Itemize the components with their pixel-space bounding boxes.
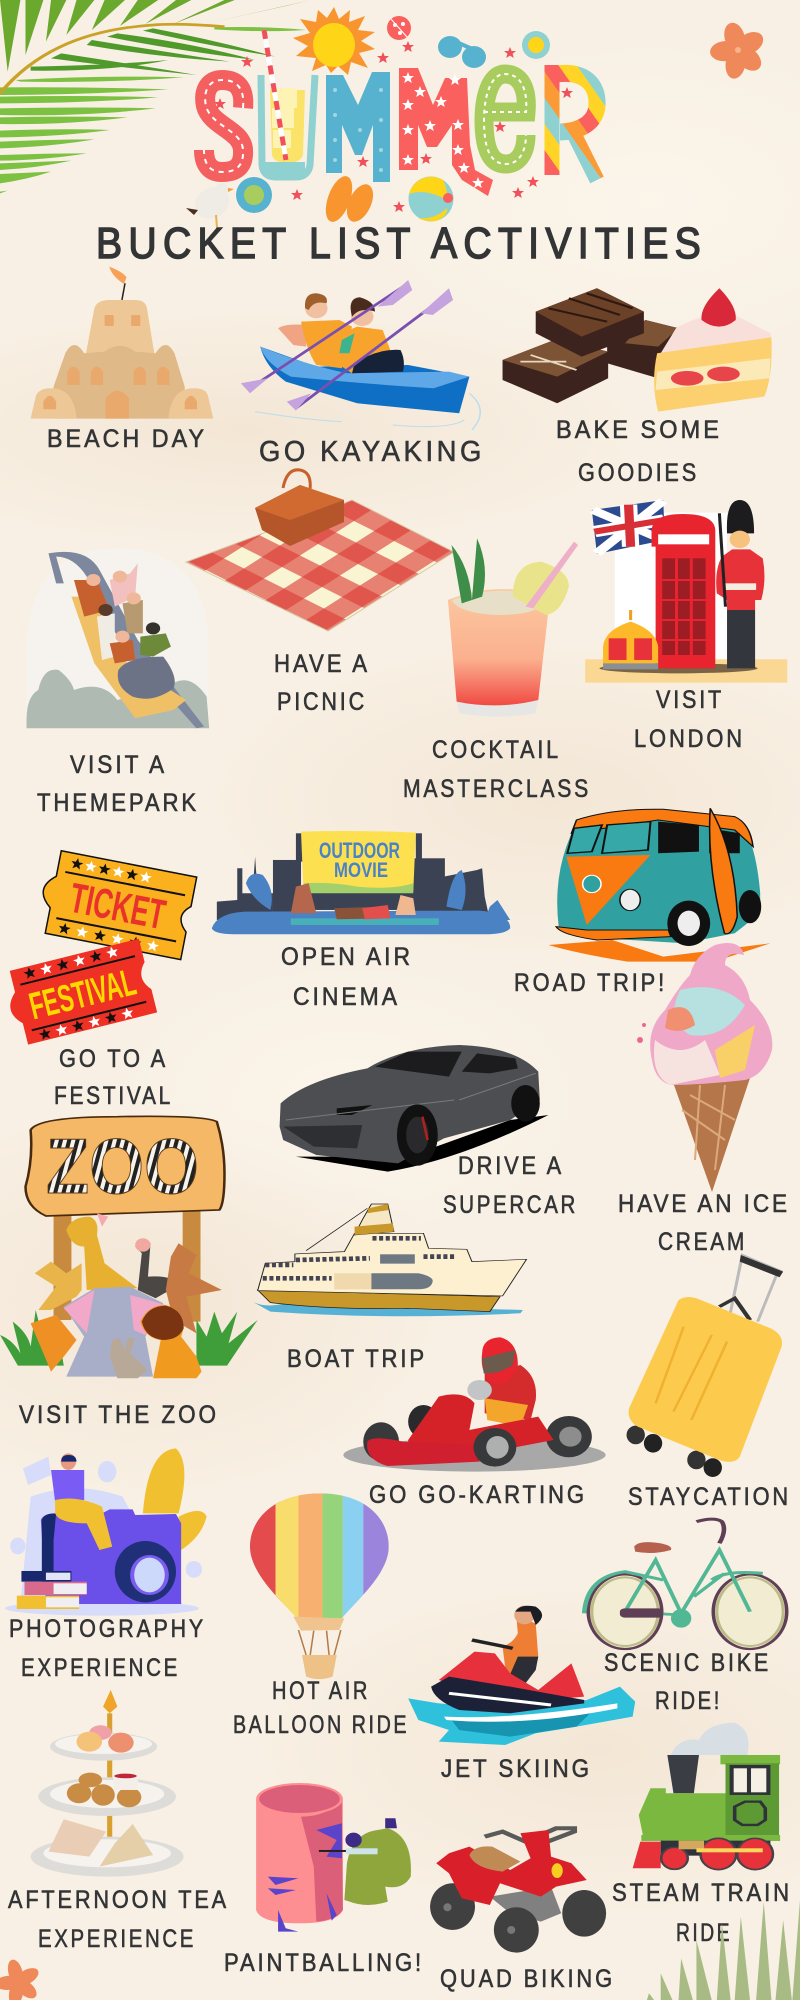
text: outdoor movie: MOVIE: [334, 859, 388, 882]
icon: palm leaf: [0, 0, 311, 193]
icon: supercar: [280, 1045, 548, 1172]
icon: cocktail: [448, 538, 578, 717]
label: PHOTOGRAPHY: [9, 1615, 206, 1643]
label: MASTERCLASS: [403, 775, 591, 803]
icon: sand castle: [31, 267, 213, 419]
label: OPEN AIR: [281, 943, 413, 971]
label: [274, 650, 370, 716]
icon: orange flower top right: [709, 20, 767, 80]
letter S: [204, 80, 243, 172]
icon: flip flops: [320, 173, 378, 226]
label: VISIT: [656, 686, 724, 714]
icon: afternoon tea stand: [31, 1690, 184, 1877]
elephant: [64, 1287, 163, 1377]
lion: [140, 1305, 202, 1378]
label: BALLOON RIDE: [233, 1711, 409, 1739]
icon: seagull: [186, 181, 235, 228]
label: VISIT THE ZOO: [19, 1401, 219, 1429]
icon: phone box: [652, 514, 715, 668]
label: EXPERIENCE: [21, 1654, 180, 1682]
label: CINEMA: [293, 983, 400, 1011]
label: [556, 416, 722, 487]
text: zoo: ZOO: [46, 1122, 199, 1210]
letter E green: [484, 74, 526, 164]
icon: quad bike: [430, 1828, 606, 1953]
label: FESTIVAL: [54, 1082, 173, 1110]
icon: outdoor movie: [212, 831, 510, 934]
label: GO TO A: [59, 1045, 168, 1073]
icon: paintball: [256, 1784, 411, 1932]
icon: london scene: [585, 500, 787, 683]
leopard: [35, 1262, 82, 1310]
icon: guard: [716, 500, 764, 668]
label: VISIT A: [70, 751, 167, 779]
skyline and speakers: [212, 831, 510, 934]
icon: steam train: [633, 1723, 780, 1870]
label: HOT AIR: [272, 1677, 370, 1705]
label: EXPERIENCE: [38, 1925, 196, 1953]
icon: basket: [255, 470, 344, 546]
title: Summer lettering: [186, 7, 597, 228]
label: COCKTAIL: [432, 736, 561, 764]
label: QUAD BIKING: [440, 1965, 615, 1993]
label: BAKE SOME: [556, 416, 722, 444]
icon: rollercoaster: [27, 548, 209, 728]
label: CREAM: [658, 1228, 747, 1256]
grass: [0, 1310, 258, 1366]
label: JET SKIING: [441, 1755, 592, 1783]
icon: festival ticket: [1, 939, 157, 1047]
tiger: [31, 1315, 77, 1372]
label: RIDE: [676, 1919, 732, 1947]
label: RIDE!: [655, 1687, 722, 1715]
gazelle: [166, 1243, 222, 1333]
icon: sun: [293, 7, 375, 75]
label: SUPERCAR: [443, 1191, 578, 1219]
label: BEACH DAY: [47, 425, 207, 453]
icon: jet ski: [408, 1606, 635, 1745]
giraffe: [66, 1217, 138, 1290]
icon: ladybird: [387, 16, 411, 40]
icon: hot air balloon: [245, 1490, 394, 1679]
icon: ticket: TICKET: [66, 874, 170, 938]
label: [281, 943, 413, 1011]
label: [443, 1152, 578, 1219]
label: DRIVE A: [458, 1152, 564, 1180]
icon: bicycle: [584, 1519, 787, 1649]
label: ROAD TRIP!: [514, 969, 667, 997]
label: THEMEPARK: [37, 789, 199, 817]
label: [604, 1649, 771, 1715]
icon: person: [51, 1453, 112, 1550]
icon: photography: [5, 1448, 207, 1616]
label: PICNIC: [277, 688, 367, 716]
icon: blue flower: [236, 177, 272, 213]
label: [634, 686, 745, 753]
label: [8, 1886, 229, 1953]
icon: grass bottom right: [647, 1900, 800, 2000]
label: [233, 1677, 409, 1739]
label: GOODIES: [578, 459, 699, 487]
label: [9, 1615, 206, 1682]
icon: sunglasses: [438, 36, 486, 68]
icon: kayak: [241, 280, 480, 430]
stars around lettering: [214, 41, 573, 212]
label: LONDON: [634, 725, 745, 753]
label: [37, 751, 199, 817]
letter R striped: [550, 65, 597, 180]
label: [618, 1190, 790, 1256]
icon: zoo sign and animals: [0, 1116, 258, 1378]
icon: brownies and cake: [503, 288, 772, 412]
icon: orange flower bottom left: [0, 1958, 41, 2000]
icon: crown: [603, 610, 658, 669]
ostrich: [135, 1241, 176, 1298]
label: GO KAYAKING: [259, 436, 485, 468]
icon: boat: [253, 1204, 527, 1316]
icon: picnic blanket and basket: [186, 470, 454, 631]
icon: small flower: [522, 31, 550, 59]
label: GO GO-KARTING: [369, 1481, 587, 1509]
label: SCENIC BIKE: [604, 1649, 771, 1677]
label: [403, 736, 591, 803]
label: BOAT TRIP: [287, 1345, 427, 1373]
label: HAVE A: [274, 650, 370, 678]
icon: ticket: [35, 849, 197, 960]
icon: go-kart: [343, 1337, 606, 1472]
icon: suitcase: [627, 1255, 783, 1477]
icon: ice cream: [637, 943, 772, 1192]
letter M red: [399, 68, 493, 196]
letter M blue: [326, 72, 390, 182]
label: AFTERNOON TEA: [8, 1886, 229, 1914]
icon: union flag: [592, 500, 665, 554]
icon: beach ball: [408, 176, 454, 222]
label: [612, 1879, 792, 1947]
rabbit: [110, 1338, 148, 1378]
text: outdoor movie: [319, 838, 400, 882]
label: PAINTBALLING!: [224, 1949, 424, 1977]
icon: festival ticket: FESTIVAL: [25, 961, 140, 1028]
icon: camper van: [548, 808, 770, 962]
text: outdoor movie: OUTDOOR: [319, 838, 400, 863]
heading: bucket list activities: BUCKET LIST ACTIVITIES: [96, 219, 707, 268]
label: [54, 1045, 173, 1110]
letter U glass: [261, 30, 315, 177]
